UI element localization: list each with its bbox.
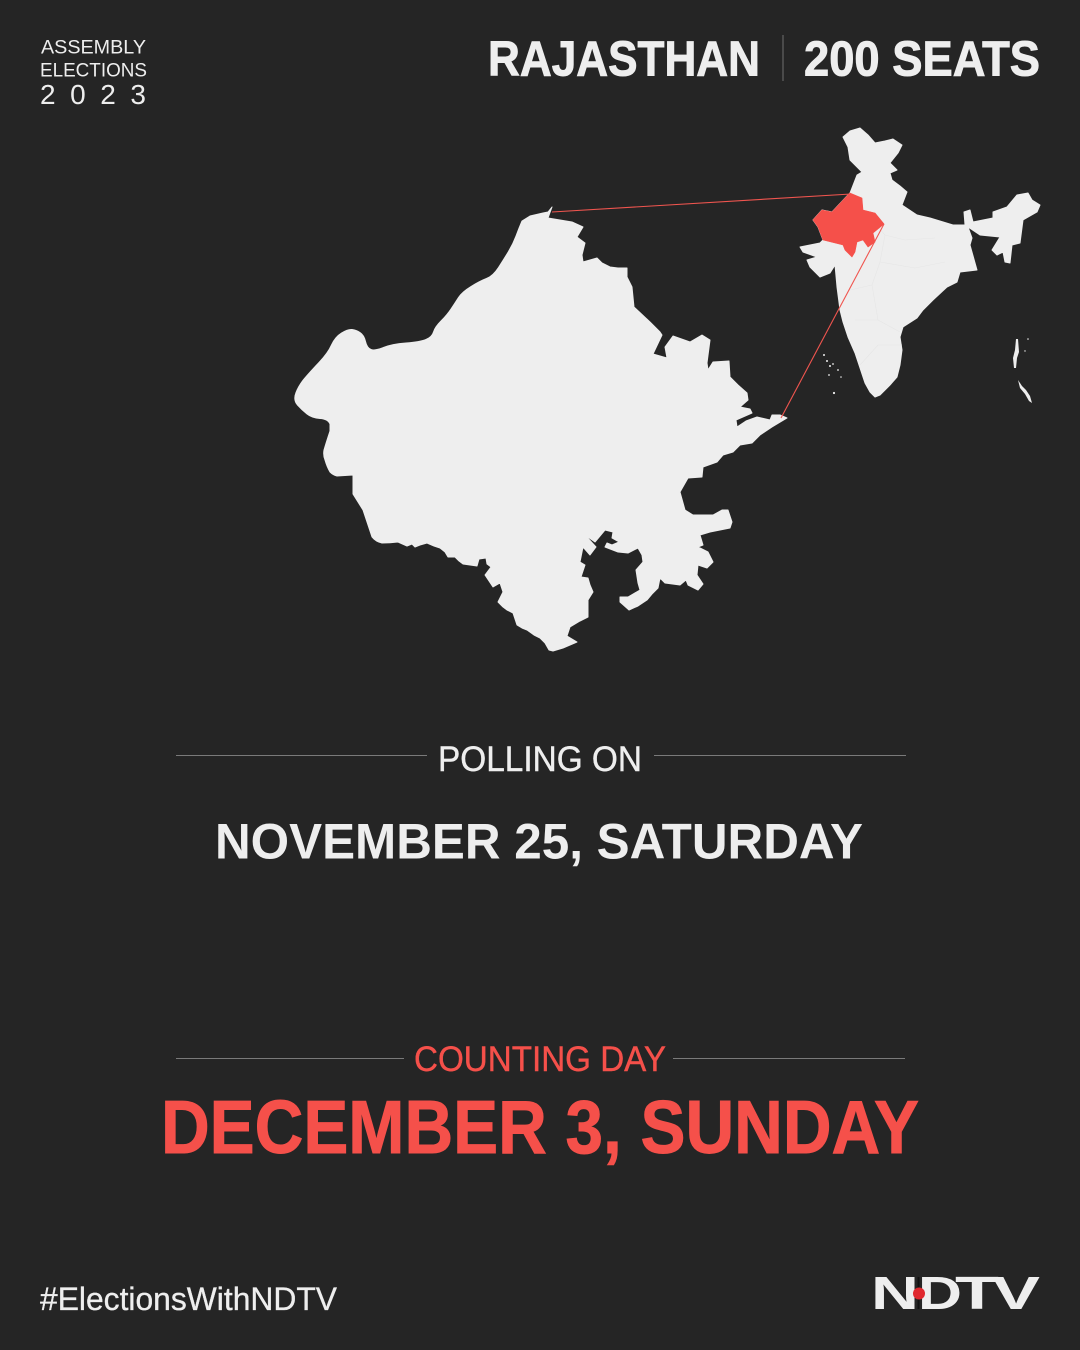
hashtag: #ElectionsWithNDTV — [40, 1281, 338, 1317]
logo: NDTV: V — [992, 1267, 1040, 1319]
badge: assembly elections 2023: ELECTIONS — [40, 60, 147, 82]
badge: assembly elections 2023: ASSEMBLY — [41, 38, 146, 58]
logo: NDTV: T — [955, 1267, 999, 1319]
map: India with Rajasthan highlighted — [800, 128, 1040, 403]
counting label with rules: COUNTING DAY — [414, 1040, 666, 1079]
section: counting day — [161, 1040, 919, 1169]
connector lines: India to enlarged map — [552, 194, 884, 418]
title: Rajasthan 200 seats: 200 SEATS — [804, 32, 1040, 86]
polling date: NOVEMBER 25, SATURDAY — [215, 814, 863, 870]
Andaman and Lakshadweep islands — [823, 338, 1032, 403]
section: polling date — [176, 740, 906, 870]
state borders — [850, 210, 945, 365]
counting date: DECEMBER 3, SUNDAY — [161, 1085, 919, 1169]
logo: NDTV: N — [871, 1267, 919, 1319]
title: Rajasthan 200 seats — [488, 32, 1040, 86]
India outline — [800, 128, 1040, 397]
logo: NDTV: D — [918, 1267, 962, 1319]
Rajasthan highlight — [813, 193, 884, 257]
map: enlarged Rajasthan outline — [295, 207, 787, 651]
polling label with rules: POLLING ON — [438, 740, 642, 779]
title: Rajasthan 200 seats: RAJASTHAN — [488, 32, 760, 86]
badge: assembly elections 2023: 2023 — [40, 79, 146, 110]
badge: assembly elections 2023 — [40, 38, 147, 110]
logo: NDTV — [871, 1267, 1040, 1319]
